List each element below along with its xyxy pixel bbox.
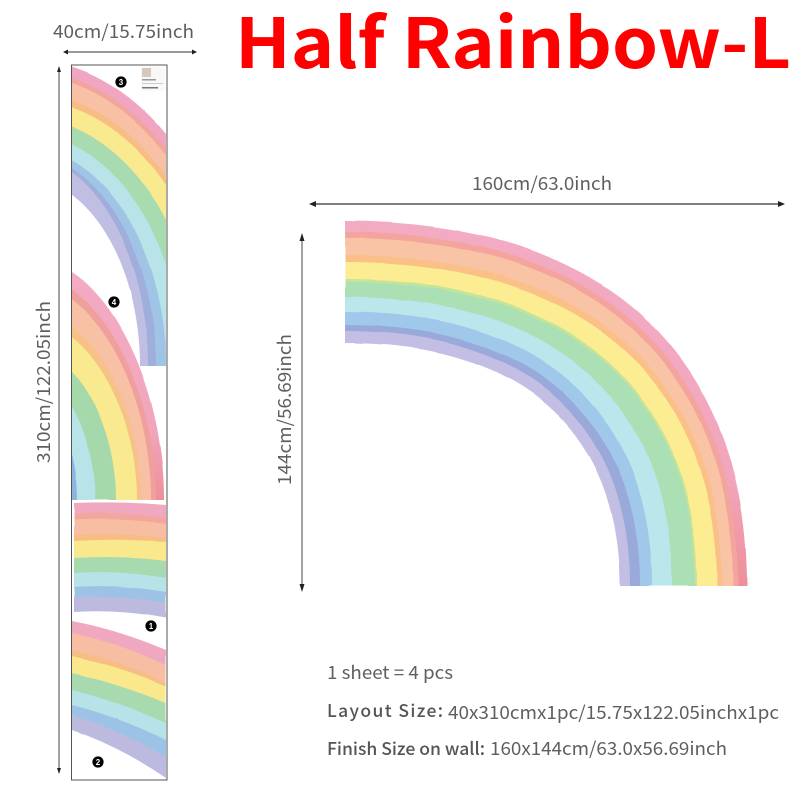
arrow: finished height	[300, 233, 304, 592]
arrow: finished width	[309, 201, 785, 207]
marker 2: 2	[96, 758, 101, 767]
marker 4	[108, 296, 120, 308]
panel: layout sheet	[71, 64, 168, 780]
sheet frame	[72, 65, 167, 780]
rainbow piece 3	[72, 66, 166, 366]
text: finish size: 160x144cm/63.0x56.69inch	[490, 735, 727, 761]
dimension label: finished height: 144cm/56.69inch	[271, 334, 297, 485]
marker 1: 1	[149, 622, 154, 631]
text: finish size	[327, 735, 727, 761]
marker 1	[145, 620, 157, 632]
text: sheet count: 1 sheet = 4 pcs	[327, 659, 453, 685]
text: layout size: 40x310cmx1pc/15.75x122.05inchx1pc	[448, 699, 779, 725]
text: finish size: Finish Size on wall:	[327, 736, 485, 761]
sheet label sticker	[141, 67, 165, 91]
dimension label: finished width: 160cm/63.0inch	[472, 170, 612, 196]
arrow: layout width	[63, 50, 197, 54]
rainbow piece 1	[74, 502, 166, 622]
marker 2	[92, 756, 104, 768]
dimension label: layout height: 310cm/122.05inch	[30, 301, 56, 463]
rainbow piece 4	[72, 272, 164, 500]
dimension label: layout width: 40cm/15.75inch	[53, 18, 194, 44]
text: layout size	[327, 698, 779, 725]
text: layout size: Layout Size:	[327, 698, 443, 723]
marker 3: 3	[119, 78, 124, 87]
finished rainbow	[345, 221, 747, 586]
marker 4: 4	[112, 298, 117, 307]
arrow: layout height	[57, 66, 61, 774]
marker 3	[115, 76, 127, 88]
rainbow piece 2	[72, 621, 166, 785]
